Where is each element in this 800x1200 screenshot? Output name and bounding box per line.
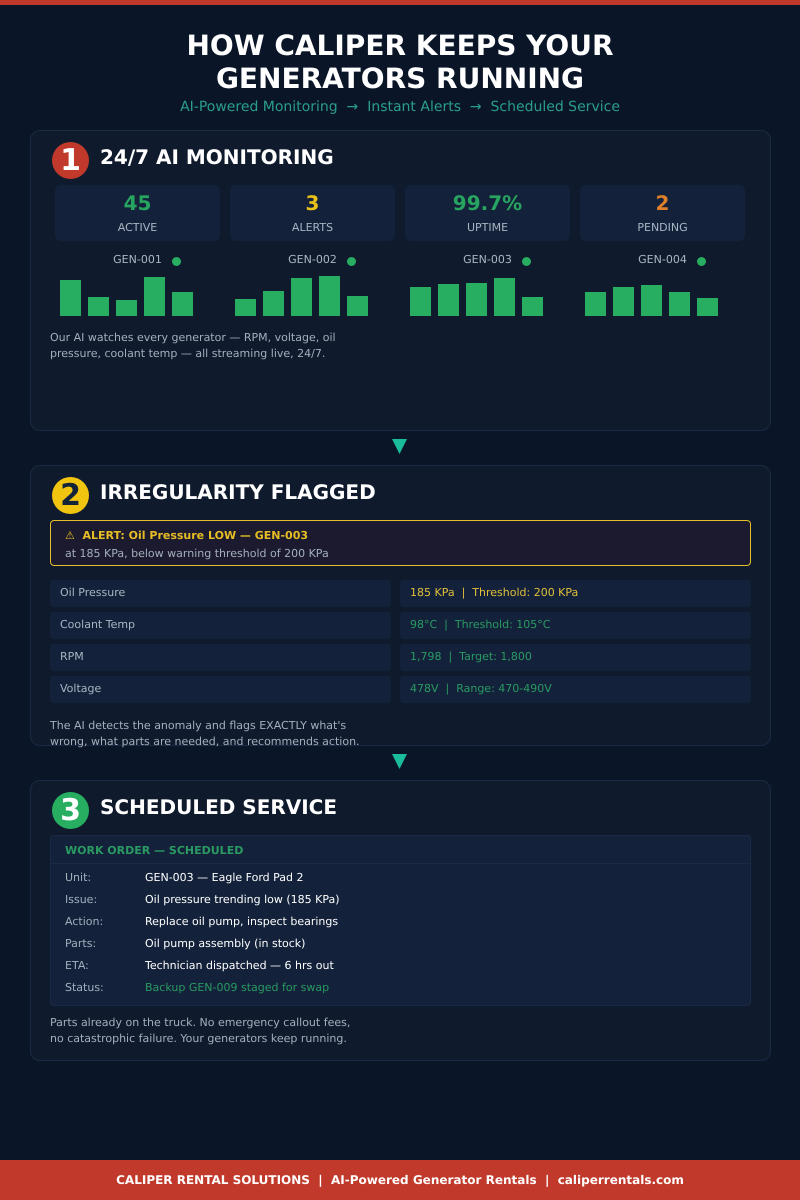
row: action: Replace oil pump, inspect bearings [145, 915, 338, 928]
row: parts: Oil pump assembly (in stock) [145, 937, 305, 950]
row: eta: ETA: [65, 959, 89, 972]
panel: scheduled service [30, 780, 771, 1061]
metric: voltage value [400, 676, 751, 703]
stat: active: 45 [124, 191, 151, 215]
metric: rpm label: RPM [60, 650, 84, 663]
step 2 badge: 2 [60, 478, 81, 513]
metric: coolant label [50, 612, 391, 639]
work order card [50, 835, 751, 1006]
generator GEN-003 chart [410, 253, 543, 316]
monitoring description: Our AI watches every generator — RPM, voltage, oil [50, 331, 336, 344]
anomaly description: wrong, what parts are needed, and recommends action. [50, 735, 360, 748]
work order header: WORK ORDER — SCHEDULED [65, 844, 243, 857]
step 3 badge: 3 [60, 793, 81, 828]
generator GEN-004 chart: GEN-004 [638, 253, 687, 266]
arrow: step 1 to 2 [392, 439, 407, 454]
title [186, 29, 614, 95]
step 2 badge [52, 477, 89, 514]
metric: rpm value: 1,798 | Target: 1,800 [410, 650, 532, 663]
row: parts [65, 937, 305, 950]
stat: alerts: ALERTS [292, 221, 333, 234]
heading: scheduled service: SCHEDULED SERVICE [100, 795, 337, 819]
generator GEN-001 chart: GEN-001 [113, 253, 162, 266]
row: unit: Unit: [65, 871, 91, 884]
generator GEN-001 chart [60, 253, 193, 316]
heading: irregularity: IRREGULARITY FLAGGED [100, 480, 376, 504]
service description: Parts already on the truck. No emergency callout fees, [50, 1016, 350, 1029]
anomaly description: The AI detects the anomaly and flags EXACTLY what's [50, 719, 346, 732]
stat: alerts: 3 [306, 191, 319, 215]
alert detail: at 185 KPa, below warning threshold of 200 KPa [65, 547, 329, 560]
metric: voltage label [50, 676, 391, 703]
panel: 24/7 AI monitoring [30, 130, 771, 431]
anomaly description [50, 719, 360, 748]
generator GEN-003 chart: GEN-003 [463, 253, 512, 266]
service description [50, 1016, 350, 1045]
alert box [50, 520, 751, 566]
stat: pending: 2 [656, 191, 669, 215]
metric: coolant label: Coolant Temp [60, 618, 135, 631]
metric: oil pressure label: Oil Pressure [60, 586, 125, 599]
monitoring description [50, 331, 336, 360]
row: action: Action: [65, 915, 103, 928]
subtitle: AI-Powered Monitoring → Instant Alerts → Scheduled Service [180, 99, 620, 115]
metric: rpm label [50, 644, 391, 671]
row: status [65, 981, 329, 994]
stat: pending [580, 185, 745, 241]
arrow: step 2 to 3 [392, 754, 407, 769]
metric: voltage label: Voltage [60, 682, 101, 695]
stat: uptime [405, 185, 570, 241]
row: issue: Issue: [65, 893, 97, 906]
step 1 badge: 1 [60, 143, 81, 178]
metric: oil pressure value: 185 KPa | Threshold: 200 KPa [410, 586, 578, 599]
metric: voltage value: 478V | Range: 470-490V [410, 682, 552, 695]
footer bar: CALIPER RENTAL SOLUTIONS | AI-Powered Generator Rentals | caliperrentals.com [116, 1173, 684, 1187]
metric: coolant value: 98°C | Threshold: 105°C [410, 618, 550, 631]
row: status: Backup GEN-009 staged for swap [145, 981, 329, 994]
stat: active [55, 185, 220, 241]
stat: alerts [230, 185, 395, 241]
generator GEN-002 chart: GEN-002 [288, 253, 337, 266]
row: status: Status: [65, 981, 104, 994]
stat: pending: PENDING [637, 221, 688, 234]
metric: coolant value [400, 612, 751, 639]
title: GENERATORS RUNNING [216, 62, 584, 95]
top accent bar [0, 0, 800, 5]
metric: oil pressure value [400, 580, 751, 607]
metric: rpm value [400, 644, 751, 671]
row: eta: Technician dispatched — 6 hrs out [145, 959, 334, 972]
row: unit: GEN-003 — Eagle Ford Pad 2 [145, 871, 304, 884]
footer bar [0, 1160, 800, 1200]
stat: uptime: UPTIME [467, 221, 508, 234]
panel: irregularity flagged [30, 465, 771, 746]
generator GEN-004 chart [585, 253, 718, 316]
service description: no catastrophic failure. Your generators keep running. [50, 1032, 347, 1045]
monitoring description: pressure, coolant temp — all streaming live, 24/7. [50, 347, 325, 360]
alert heading: ⚠ ALERT: Oil Pressure LOW — GEN-003 [65, 529, 308, 542]
stat: uptime: 99.7% [453, 191, 522, 215]
heading: monitoring: 24/7 AI MONITORING [100, 145, 334, 169]
title: HOW CALIPER KEEPS YOUR [186, 29, 614, 62]
row: unit [65, 871, 304, 884]
stat: active: ACTIVE [118, 221, 157, 234]
generator GEN-002 chart [235, 253, 368, 316]
step 1 badge [52, 142, 89, 179]
metric: oil pressure label [50, 580, 391, 607]
work order header [51, 836, 750, 864]
row: parts: Parts: [65, 937, 96, 950]
row: issue: Oil pressure trending low (185 KPa) [145, 893, 340, 906]
step 3 badge [52, 792, 89, 829]
